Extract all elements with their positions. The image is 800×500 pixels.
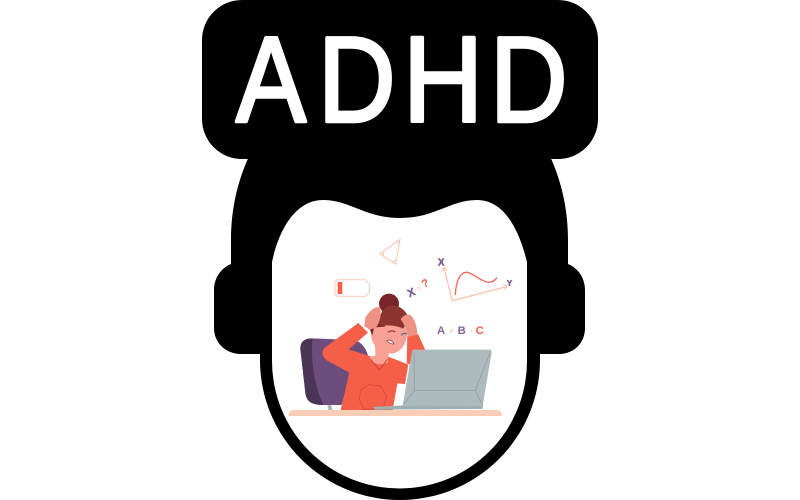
formula: a plus b minus c: A [437,325,445,337]
formula: a plus b minus c: B [458,325,466,337]
illustration: stressed woman at laptop [288,239,513,416]
laptop [373,350,492,410]
title: ADHD [236,11,568,148]
formula: x equals question mark [405,277,432,300]
formula: a plus b minus c [437,325,484,337]
formula: a plus b minus c: C [476,325,484,337]
head silhouette [214,150,585,500]
face [371,320,407,354]
chair [300,338,369,410]
formula: a plus b minus c: - [469,325,472,335]
torso and raised arm [322,323,408,410]
chart: xy curve: X [438,257,445,268]
neck [369,342,390,364]
icon: triangle [380,239,400,264]
chart: xy curve: Y [507,278,513,288]
hair bun [379,294,399,314]
chart: xy curve [438,257,513,301]
title: ADHD: H [403,11,483,148]
far sleeve [407,334,425,365]
hair [379,305,409,329]
formula: x equals question mark: ? [420,277,431,291]
right hand [401,314,417,337]
formula: a plus b minus c: + [449,326,454,336]
desk [288,410,502,416]
title banner [202,0,598,159]
sweater emblem [359,385,386,409]
left hand [364,307,381,330]
formula: x equals question mark: = [414,283,423,294]
formula: x equals question mark: X [406,286,418,300]
woman [322,294,425,410]
necklace [370,359,387,370]
icon: low battery [335,280,369,296]
face opening [272,200,527,489]
eyes and mouth [387,331,407,344]
title: ADHD: D [490,12,568,148]
title: ADHD: A [236,12,306,148]
hair back strand [369,315,385,335]
title: ADHD: D [318,12,396,148]
